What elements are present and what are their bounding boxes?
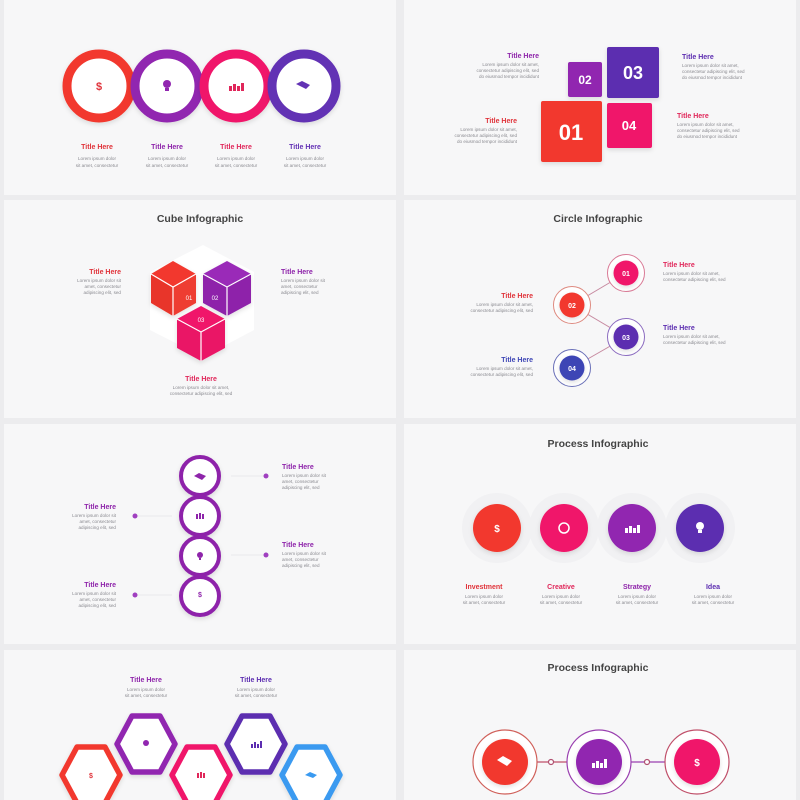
- square labels: Title Here: [682, 54, 714, 61]
- chain labels: amet, consectetur: [282, 557, 319, 562]
- step icons: [494, 522, 704, 535]
- ring labels: sit amet, consectetur: [76, 163, 119, 168]
- cube 01: 01: [186, 296, 193, 302]
- circle labels: Title Here: [501, 357, 533, 364]
- cube 01: [151, 261, 196, 316]
- circle labels: consectetur adipiscing elit, sed: [663, 340, 726, 345]
- background hexagon: [150, 245, 254, 357]
- circle labels: Lorem ipsum dolor sit amet,: [476, 302, 533, 307]
- cube labels: Lorem ipsum dolor sit amet,: [173, 385, 229, 390]
- square labels: do eiusmod tempor incididunt: [677, 134, 738, 139]
- cube 02: 02: [212, 296, 219, 302]
- chain labels: Lorem ipsum dolor sit: [72, 513, 117, 518]
- chain labels: amet, consectetur: [79, 519, 116, 524]
- cube labels: [77, 269, 326, 396]
- circle c: [665, 730, 729, 794]
- panel: process infographic: [462, 438, 735, 605]
- circle b: [567, 730, 631, 794]
- ring labels: sit amet, consectetur: [215, 163, 258, 168]
- square 04: 04: [622, 118, 637, 133]
- step circles: [473, 504, 724, 552]
- circle 03: 03: [622, 335, 630, 342]
- cube labels: Title Here: [89, 269, 121, 276]
- square labels: do eiusmod tempor incididunt: [682, 75, 743, 80]
- hexagon shapes: [62, 716, 340, 800]
- hexagon labels: sit amet, consectetur: [235, 693, 278, 698]
- circle labels: consectetur adipiscing elit, sed: [470, 372, 533, 377]
- square labels: consectetur adipiscing elit, sed: [476, 68, 539, 73]
- circle c: $: [694, 758, 700, 769]
- panel: vertical chain: [72, 457, 327, 615]
- step labels: Strategy: [623, 584, 651, 591]
- square labels: Lorem ipsum dolor sit amet,: [482, 62, 539, 67]
- ring labels: sit amet, consectetur: [146, 163, 189, 168]
- chain rings: [181, 457, 219, 615]
- step labels: sit amet, consectetur: [540, 600, 583, 605]
- chain labels: [72, 464, 327, 608]
- chain labels: adipiscing elit, sed: [282, 485, 320, 490]
- cube labels: Lorem ipsum dolor sit: [281, 278, 326, 283]
- hexagon labels: Lorem ipsum dolor: [237, 687, 275, 692]
- chain labels: amet, consectetur: [79, 597, 116, 602]
- chain labels: Title Here: [282, 542, 314, 549]
- halos: [462, 493, 735, 563]
- cube labels: adipiscing elit, sed: [281, 290, 319, 295]
- chain icons: [194, 473, 206, 599]
- cube labels: Lorem ipsum dolor sit: [77, 278, 122, 283]
- square labels: Lorem ipsum dolor sit amet,: [682, 63, 739, 68]
- circle labels: consectetur adipiscing elit, sed: [470, 308, 533, 313]
- ring 4: [272, 54, 336, 118]
- circle labels: [470, 262, 726, 377]
- square 03: [607, 47, 659, 98]
- cube labels: adipiscing elit, sed: [83, 290, 121, 295]
- cube labels: amet, consectetur: [84, 284, 121, 289]
- heading: Process Infographic: [548, 662, 649, 674]
- circle a: [473, 730, 537, 794]
- cube 03: [177, 306, 225, 361]
- chain labels: adipiscing elit, sed: [282, 563, 320, 568]
- step labels: Investment: [466, 584, 503, 591]
- connectors: [537, 760, 666, 764]
- panel: circle infographic: [470, 213, 726, 386]
- hexagon labels: sit amet, consectetur: [125, 693, 168, 698]
- chain labels: adipiscing elit, sed: [78, 525, 116, 530]
- cube labels: amet, consectetur: [281, 284, 318, 289]
- ring labels: Lorem ipsum dolor: [78, 156, 116, 161]
- step icons: $: [494, 524, 500, 535]
- ring 1: [67, 54, 131, 118]
- hexagon icons: $: [89, 773, 93, 780]
- ring labels: [76, 144, 327, 168]
- chain labels: Title Here: [282, 464, 314, 471]
- circle 02: [554, 286, 590, 324]
- ring labels: Title Here: [220, 144, 252, 151]
- cube 03: 03: [198, 318, 205, 324]
- square 02: [568, 62, 602, 97]
- heading: Process Infographic: [548, 438, 649, 450]
- square labels: Lorem ipsum dolor sit amet,: [677, 122, 734, 127]
- panel: process connected circles: [473, 662, 729, 794]
- circle labels: Lorem ipsum dolor sit amet,: [663, 271, 720, 276]
- square labels: Title Here: [507, 53, 539, 60]
- square 04: [607, 103, 652, 148]
- connectors: [572, 273, 626, 368]
- step labels: Creative: [547, 584, 575, 591]
- hexagon labels: Lorem ipsum dolor: [127, 687, 165, 692]
- ring labels: Title Here: [81, 144, 113, 151]
- cube labels: consectetur adipiscing elit, sed: [170, 391, 233, 396]
- chain labels: amet, consectetur: [282, 479, 319, 484]
- square labels: do eiusmod tempor incididunt: [457, 139, 518, 144]
- cube 02: [203, 261, 251, 316]
- circle 01: [608, 254, 644, 292]
- ring labels: sit amet, consectetur: [284, 163, 327, 168]
- hexagon labels: [125, 677, 278, 698]
- circle labels: Title Here: [501, 293, 533, 300]
- connector dots: [132, 474, 268, 598]
- hexagon labels: Title Here: [240, 677, 272, 684]
- square labels: do eiusmod tempor incididunt: [479, 74, 540, 79]
- chain labels: Lorem ipsum dolor sit: [282, 473, 327, 478]
- panel: hexagons: [62, 677, 340, 800]
- hexagon icons: [89, 740, 317, 780]
- chain labels: Lorem ipsum dolor sit: [282, 551, 327, 556]
- chain labels: Title Here: [84, 582, 116, 589]
- ring labels: Lorem ipsum dolor: [148, 156, 186, 161]
- circle 04: 04: [568, 366, 576, 373]
- circle labels: Lorem ipsum dolor sit amet,: [476, 366, 533, 371]
- step labels: Idea: [706, 584, 720, 591]
- ring labels: Lorem ipsum dolor: [217, 156, 255, 161]
- square 01: [541, 101, 602, 162]
- step labels: [463, 584, 735, 605]
- circle labels: Title Here: [663, 262, 695, 269]
- panel: cube infographic: [77, 213, 326, 396]
- chain labels: Lorem ipsum dolor sit: [72, 591, 117, 596]
- circle 04: [554, 350, 590, 386]
- circle 01: 01: [622, 271, 630, 278]
- square labels: consectetur adipiscing elit, sed: [682, 69, 745, 74]
- ring labels: Lorem ipsum dolor: [286, 156, 324, 161]
- step labels: Lorem ipsum dolor: [618, 594, 656, 599]
- panel: linked rings: [67, 54, 336, 168]
- square 01: 01: [559, 120, 583, 145]
- circle labels: consectetur adipiscing elit, sed: [663, 277, 726, 282]
- step labels: Lorem ipsum dolor: [465, 594, 503, 599]
- square 03: 03: [623, 63, 643, 83]
- circle labels: Lorem ipsum dolor sit amet,: [663, 334, 720, 339]
- panel: numbered squares: [454, 47, 745, 162]
- chain labels: Title Here: [84, 504, 116, 511]
- cube labels: Title Here: [185, 376, 217, 383]
- square labels: Title Here: [677, 113, 709, 120]
- heading: Circle Infographic: [553, 213, 643, 225]
- chain icons: $: [198, 592, 202, 599]
- square labels: consectetur adipiscing elit, sed: [677, 128, 740, 133]
- circle labels: Title Here: [663, 325, 695, 332]
- ring labels: Title Here: [151, 144, 183, 151]
- square labels: Title Here: [485, 118, 517, 125]
- ring 1: $: [96, 81, 102, 93]
- square labels: Lorem ipsum dolor sit amet,: [460, 127, 517, 132]
- cube labels: Title Here: [281, 269, 313, 276]
- step labels: sit amet, consectetur: [616, 600, 659, 605]
- step labels: Lorem ipsum dolor: [694, 594, 732, 599]
- hexagon labels: Title Here: [130, 677, 162, 684]
- square 02: 02: [578, 73, 592, 87]
- step labels: sit amet, consectetur: [692, 600, 735, 605]
- square labels: consectetur adipiscing elit, sed: [454, 133, 517, 138]
- chain labels: adipiscing elit, sed: [78, 603, 116, 608]
- ring 2: [135, 54, 199, 118]
- step labels: sit amet, consectetur: [463, 600, 506, 605]
- circle 03: [608, 318, 644, 356]
- square labels: [454, 53, 745, 144]
- ring labels: Title Here: [289, 144, 321, 151]
- ring 3: [204, 54, 268, 118]
- step labels: Lorem ipsum dolor: [542, 594, 580, 599]
- circle 02: 02: [568, 303, 576, 310]
- heading: Cube Infographic: [157, 213, 243, 225]
